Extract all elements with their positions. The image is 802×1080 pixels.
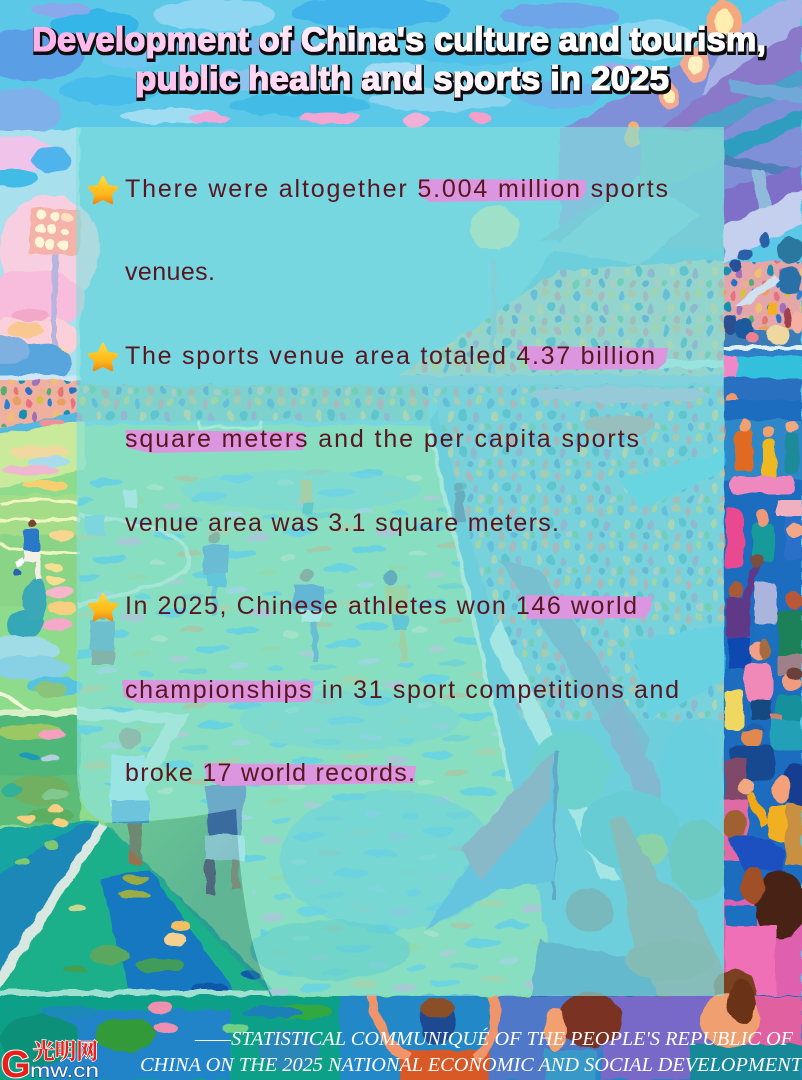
left pink sky and floodlight [0, 130, 100, 383]
title: public health and sports in 2025 [135, 60, 669, 98]
bullet 3: world championships: broke 17 world records. [125, 759, 415, 787]
page curl shadow [104, 809, 272, 996]
logo: Guangming: 光明网 [33, 1035, 98, 1066]
bottom strip with fans [0, 980, 802, 1080]
bullet 2: venue area [89, 342, 655, 537]
bullet 3: world championships [89, 592, 679, 787]
source attribution [140, 1027, 802, 1076]
title: Development of China's culture and tourism, [32, 21, 766, 59]
stadium roof [560, 0, 802, 270]
bullet 3: world championships: championships in 31 sport competitions and [125, 676, 679, 704]
bullet 2: venue area: square meters and the per capita sports [125, 425, 639, 453]
pitch dabs under panel [78, 410, 610, 996]
text highlights [122, 179, 668, 786]
player in blue on left pitch [14, 518, 40, 581]
left crowd strip [0, 375, 80, 445]
bullet 2: venue area: The sports venue area totaled 4.37 billion [125, 342, 655, 370]
bullet 1: sports venues: There were altogether 5.004 million sports [125, 175, 668, 203]
source attribution: CHINA ON THE 2025 NATIONAL ECONOMIC AND SOCIAL DEVELOPMENT [140, 1054, 802, 1076]
bullet 1: sports venues: venues. [125, 258, 215, 286]
green pitch [0, 420, 620, 1080]
right crowd lower [713, 400, 802, 1010]
sky brush strokes [0, 0, 700, 136]
bullet 1: sports venues [89, 175, 668, 286]
players under panel [85, 480, 465, 895]
crowd stands under panel [78, 130, 730, 996]
translucent text panel [76, 127, 724, 996]
title [32, 21, 766, 98]
source attribution: ——STATISTICAL COMMUNIQUÉ OF THE PEOPLE'S REPUBLIC OF [194, 1027, 794, 1050]
bullet 3: world championships: In 2025, Chinese athletes won 146 world [125, 592, 637, 620]
logo: Guangming [1, 1035, 99, 1080]
bullet 2: venue area: venue area was 3.1 square meters. [125, 509, 559, 537]
right crowd upper [722, 232, 802, 421]
